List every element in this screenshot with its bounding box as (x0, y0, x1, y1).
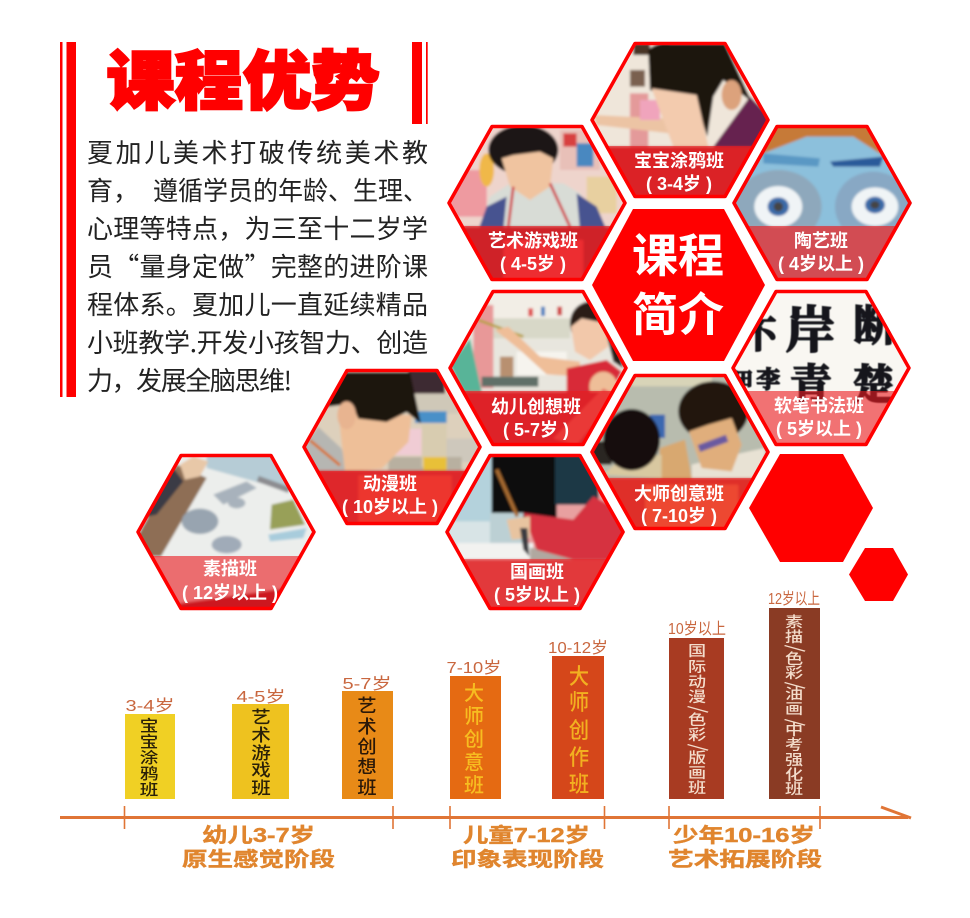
hexagon: brush calligraphy class (731, 290, 911, 446)
hexagon: animation class (298, 365, 485, 531)
body text: 心理等特点，为三至十二岁学 (87, 209, 428, 246)
hexagon: animation class: 动漫班 (363, 474, 417, 494)
body text: 小班教学.开发小孩智力、创造 (87, 323, 428, 360)
title: 课程优势 (106, 31, 380, 123)
bar: 7-10: 7-10岁 (446, 659, 502, 677)
hexagon: course intro center: 简介 (632, 289, 724, 341)
bar: over 12: 12岁以上 (768, 590, 820, 608)
bar: over 12: 化 (785, 763, 803, 784)
bar: over 12: 色 (785, 647, 803, 668)
hexagon: brush calligraphy class: 田 (734, 366, 753, 392)
stage label: child: 儿童7-12岁 (463, 823, 590, 847)
bar: 7-10: 大 (464, 677, 484, 706)
hexagon: brush calligraphy class: 青 (790, 351, 832, 411)
hexagon: course intro center (592, 209, 765, 361)
bar: 7-10: 班 (464, 769, 484, 798)
stage label: teen: 少年10-16岁 (673, 824, 815, 847)
bar: over 12: 彩 (785, 661, 803, 682)
body text: 育， (87, 171, 139, 208)
stage label: child (451, 823, 604, 871)
hexagon: child imagination class (447, 288, 633, 452)
panel: course advantages (60, 31, 428, 398)
body text: 力，发展全脑思维! (87, 361, 292, 398)
right double bar (412, 42, 428, 124)
hexagon: sketch class (133, 451, 323, 616)
body text: 程体系。夏加儿一直延续精品 (87, 285, 428, 322)
hexagon: chinese painting class: ( 5岁以上 ) (494, 585, 580, 605)
bar: 5-7: 艺 (357, 692, 377, 718)
hexagon: pottery class (732, 124, 912, 282)
bar: over 10: 10岁以上 (668, 620, 726, 638)
hexagon: baby doodle class (587, 40, 773, 206)
bar: over 10: 际 (688, 655, 706, 676)
hexagon: brush calligraphy class: 断 (853, 292, 897, 354)
stage label: infant (182, 824, 335, 871)
bar: over 12: 画 (785, 697, 803, 718)
bar: 3-4: 宝 (140, 729, 158, 752)
bar: 10-12: 班 (569, 767, 589, 799)
hexagon: animation class: ( 10岁以上 ) (342, 497, 438, 517)
hexagon: sketch class: 素描班 (203, 559, 257, 579)
bar: over 12: 油 (785, 682, 803, 703)
hexagon: brush calligraphy class: 岸 (785, 290, 835, 362)
body text: 遵循学员的年龄、生理、 (153, 171, 428, 208)
bar: 7-10: 师 (464, 700, 484, 729)
bar: 5-7: 术 (357, 713, 377, 739)
stage label: child: 印象表现阶段 (451, 847, 604, 871)
bar: over 12: \ (778, 711, 808, 731)
bar: 5-7 (342, 675, 393, 800)
hexagon: brush calligraphy class: 软笔书法班 (774, 396, 864, 416)
stage label: infant: 原生感觉阶段 (182, 847, 335, 871)
left double bar (60, 42, 76, 397)
bar: 3-4: 鸦 (140, 761, 158, 784)
bar: 10-12: 创 (569, 713, 589, 745)
hexagon: baby doodle class: 宝宝涂鸦班 (634, 150, 724, 171)
body text (87, 133, 428, 398)
hexagon: art game class: ( 4-5岁 ) (500, 254, 566, 274)
hexagon: master creativity class: 大师创意班 (634, 483, 724, 504)
hexagon: course intro center: 课程 (632, 230, 724, 282)
bar: 10-12: 大 (569, 659, 589, 691)
hexagon: pottery class: ( 4岁以上 ) (778, 254, 864, 274)
bar: 3-4: 宝 (140, 713, 158, 736)
bar: 10-12: 师 (569, 685, 589, 717)
bar: 4-5: 戏 (251, 757, 271, 782)
hexagon: art game class: 艺术游戏班 (488, 230, 578, 251)
bar: 7-10 (446, 659, 502, 799)
bar: 10-12 (548, 639, 608, 799)
bar: 10-12: 作 (569, 740, 589, 772)
arrow axis (60, 806, 911, 829)
bar: 4-5: 术 (251, 722, 271, 747)
bar: 5-7: 想 (357, 753, 377, 779)
bar: over 12: 班 (785, 777, 803, 798)
bar: over 10: 色 (688, 708, 706, 729)
hexagon: sketch class: ( 12岁以上 ) (182, 583, 278, 603)
hexagon: child imagination class: ( 5-7岁 ) (503, 420, 569, 440)
bar: over 10: \ (681, 698, 711, 718)
hexagon: baby doodle class: ( 3-4岁 ) (646, 174, 712, 194)
body text: 夏加儿美术打破传统美术教 (87, 133, 428, 170)
bar: 4-5: 游 (251, 740, 271, 765)
bar: 4-5 (232, 688, 289, 800)
bar: 7-10: 意 (464, 746, 484, 775)
body text: 员“量身定做”完整的进阶课 (87, 247, 428, 284)
hexagon: brush calligraphy class: ( 5岁以上 ) (776, 419, 862, 439)
hexagon: art game class (443, 120, 630, 286)
bar: over 10: 版 (688, 746, 706, 767)
hexagon: chinese painting class (443, 451, 630, 619)
bar: over 10: 国 (688, 639, 706, 660)
bar: 4-5: 班 (251, 775, 271, 800)
bar: 4-5: 4-5岁 (236, 688, 286, 706)
bar: over 10: 漫 (688, 685, 706, 706)
bar: over 10: \ (681, 736, 711, 756)
bar: over 12: 考 (785, 733, 803, 754)
bar: over 12: \ (778, 674, 808, 694)
bar: 5-7: 班 (357, 774, 377, 800)
hexagon: master creativity class: ( 7-10岁 ) (641, 506, 717, 526)
hexagon: child imagination class: 幼儿创想班 (491, 397, 581, 417)
hexagon: brush calligraphy class: 不 (740, 306, 778, 358)
hexagon: brush calligraphy class: 李 (757, 360, 780, 394)
bar: 7-10: 创 (464, 723, 484, 752)
bar: 3-4: 3-4岁 (126, 697, 174, 715)
bar: over 12: \ (778, 637, 808, 657)
bar: over 12: 强 (785, 748, 803, 769)
bar: over 12 (768, 590, 820, 799)
bar: over 10: 彩 (688, 723, 706, 744)
hexagon: brush calligraphy class: 楚 (852, 351, 894, 411)
bar: over 12: 中 (785, 718, 803, 739)
bar: over 10 (668, 620, 726, 799)
hexagon: chinese painting class: 国画班 (510, 562, 564, 582)
bar: over 10: 动 (688, 670, 706, 691)
bar: 3-4: 涂 (140, 745, 158, 768)
hexagon: pottery class: 陶艺班 (794, 231, 848, 251)
hexagon: large red decoration (749, 454, 873, 562)
bar: 5-7: 5-7岁 (342, 675, 392, 693)
bar: 3-4: 班 (140, 777, 158, 800)
bar: 10-12: 10-12岁 (548, 639, 608, 657)
bar: 4-5: 艺 (251, 704, 271, 729)
stage label: infant: 幼儿3-7岁 (202, 824, 315, 847)
bar: over 10: 画 (688, 761, 706, 782)
stage label: teen (668, 824, 822, 871)
bar: 5-7: 创 (357, 733, 377, 759)
chart: course progression (60, 590, 911, 871)
bar: over 12: 素 (785, 610, 803, 631)
hexagon: master creativity class (588, 371, 775, 538)
bar: over 12: 描 (785, 625, 803, 646)
bar: over 10: 班 (688, 776, 706, 797)
hexagon: small red decoration (849, 548, 908, 601)
bar: 3-4 (125, 697, 175, 800)
stage label: teen: 艺术拓展阶段 (668, 847, 822, 871)
